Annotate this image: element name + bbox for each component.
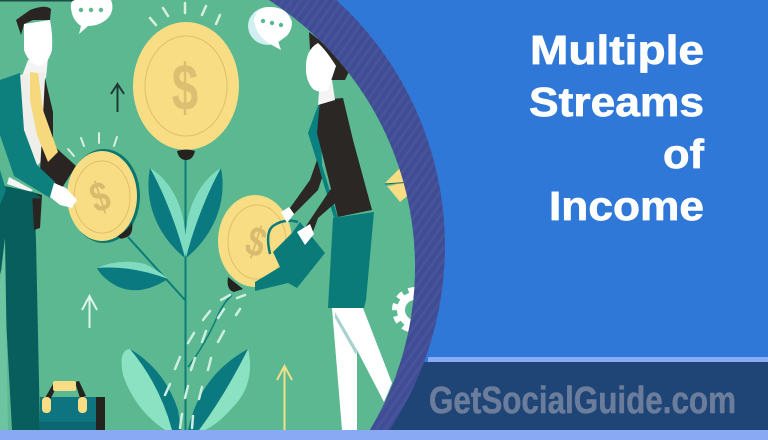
big coin <box>133 3 239 160</box>
arrow: dark up <box>111 84 124 112</box>
title: Streams <box>529 79 704 125</box>
footer band <box>380 357 768 430</box>
water drops <box>165 295 245 428</box>
green illustration circle <box>0 0 435 430</box>
watering can <box>255 207 325 291</box>
small coin held by man <box>67 133 140 243</box>
icon: speech bubble right <box>248 7 292 50</box>
plant stem and branches <box>128 155 232 430</box>
icon: gear <box>392 287 414 332</box>
icon: speech bubble left <box>71 0 112 34</box>
man's hand <box>50 183 77 208</box>
icon: envelope <box>385 168 407 202</box>
briefcase <box>40 381 105 430</box>
arrow: white up <box>82 296 97 328</box>
top edge line <box>0 0 80 2</box>
arrow: yellow up <box>277 366 292 430</box>
title: Income <box>549 183 704 229</box>
bottom strip <box>0 430 768 440</box>
third coin: $ <box>240 216 272 267</box>
title: of <box>663 131 704 177</box>
title <box>529 27 704 229</box>
woman figure <box>290 32 392 430</box>
circular ring <box>0 0 445 430</box>
side leaf <box>97 262 168 290</box>
title: Multiple <box>530 27 704 73</box>
small coin held by man: $ <box>84 171 116 222</box>
third coin <box>218 195 292 292</box>
lower leaves <box>122 348 250 430</box>
man figure <box>0 7 76 430</box>
top leaves <box>148 168 223 258</box>
big coin: $ <box>172 51 198 125</box>
